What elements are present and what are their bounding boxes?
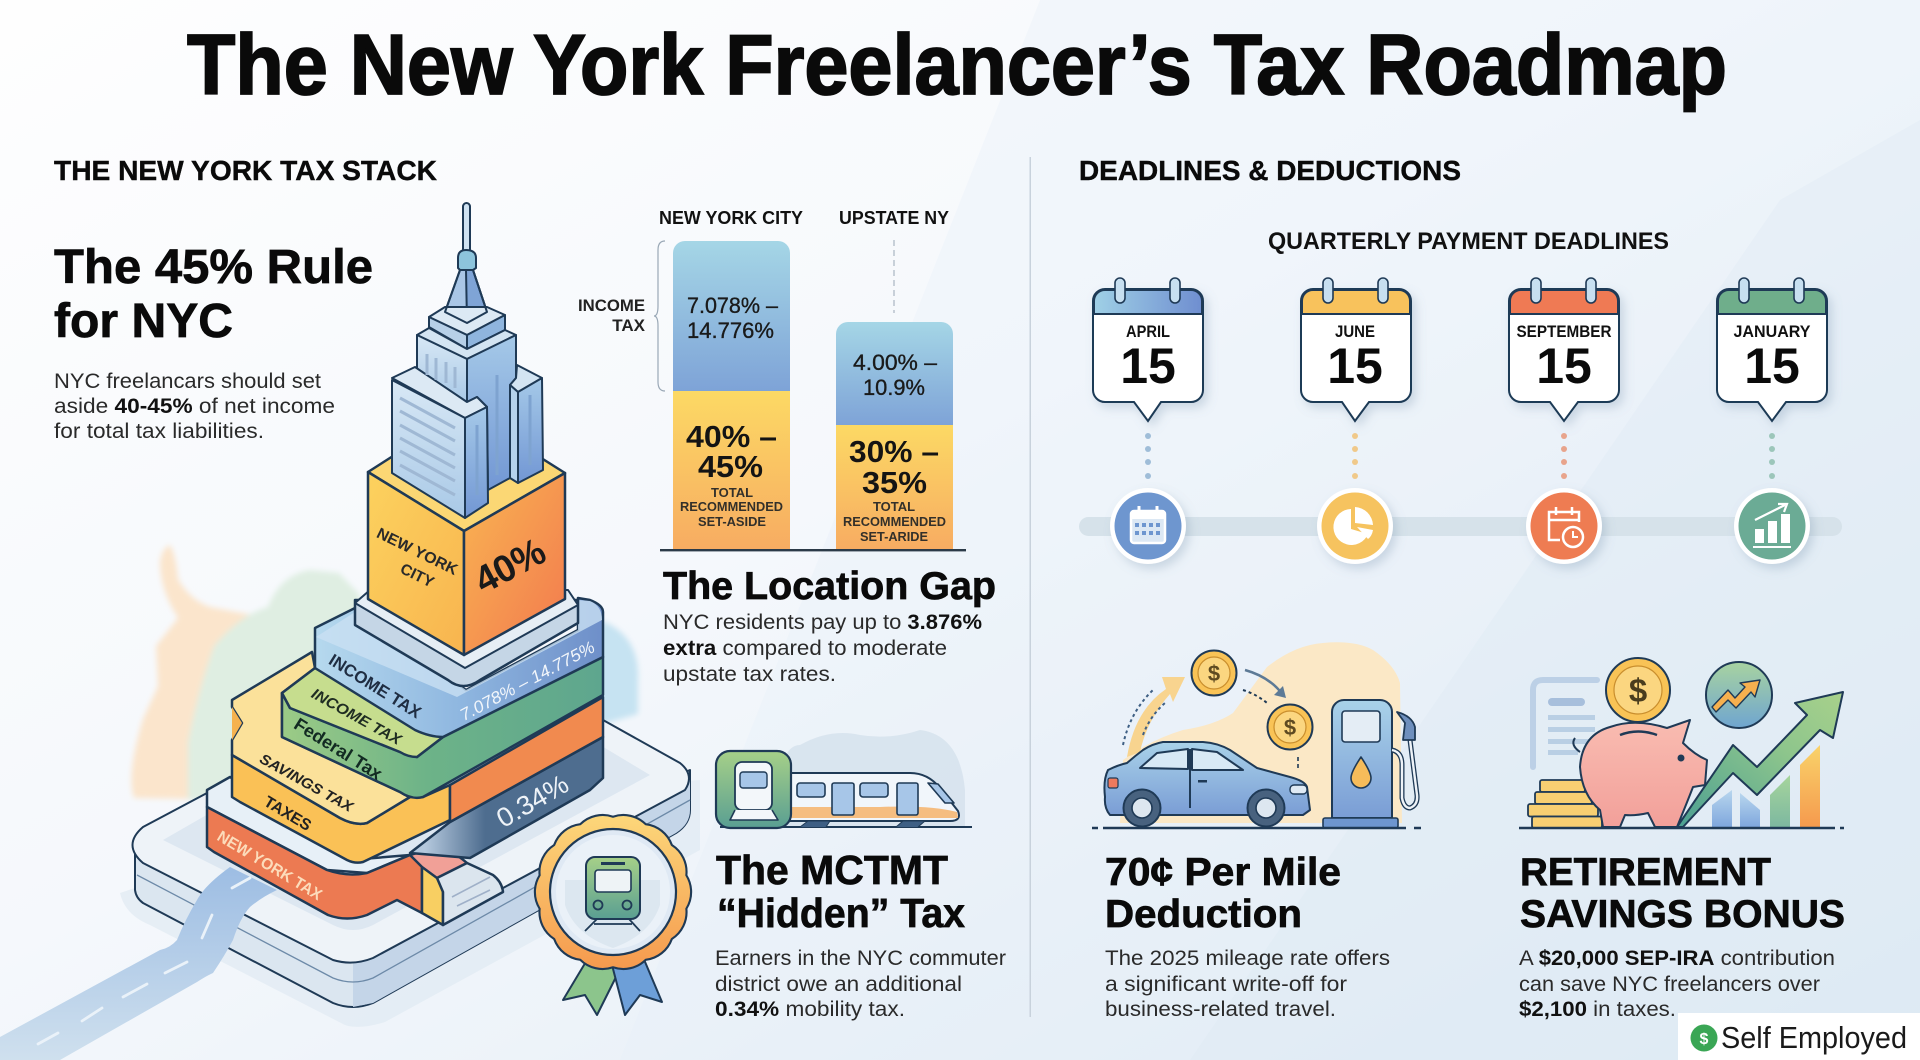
- icon: commuter train: [716, 730, 972, 828]
- chart: location gap bars: SET-ASIDE: [698, 514, 766, 529]
- text block: retirement savings bonus: can save NYC freelancers over: [1519, 972, 1820, 996]
- chart: location gap bars: 45%: [698, 449, 763, 484]
- chart: location gap bars: TOTAL: [711, 485, 753, 500]
- chart: location gap bars: 7.078% –: [687, 293, 779, 318]
- illustration: piggy bank and growth: $: [1629, 672, 1647, 709]
- watermark: self employed: Self Employed: [1721, 1020, 1907, 1055]
- text block: the 45% rule: aside 40-45% of net income: [54, 394, 335, 418]
- chart: location gap bars: 10.9%: [863, 375, 925, 400]
- calendar: september 15: SEPTEMBER: [1516, 323, 1612, 341]
- chart: location gap bars: UPSTATE NY: [839, 207, 950, 228]
- text block: the 45% rule: The 45% Rule: [54, 241, 373, 294]
- layer: new york tax: [207, 777, 503, 925]
- illustration: car and fuel pump: $: [1208, 661, 1220, 686]
- layer: green federal: [282, 657, 603, 798]
- illustration: isometric tax stack: [0, 203, 700, 1060]
- stack labels: [214, 525, 598, 904]
- calendar: june 15: 15: [1327, 338, 1383, 394]
- stack labels: TAXES: [261, 793, 314, 835]
- text block: retirement savings bonus: A $20,000 SEP-IRA contribution: [1519, 946, 1835, 970]
- icon: calendar clock marker: [1526, 488, 1602, 564]
- watermark: self employed: $: [1700, 1031, 1709, 1048]
- chart: location gap bars: [578, 207, 966, 551]
- stack labels: 7.078% – 14.775%: [457, 638, 598, 725]
- stack labels: INCOME TAX: [325, 650, 425, 723]
- text block: 70 cents per mile: Deduction: [1105, 893, 1302, 936]
- text block: the 45% rule: NYC freelancars should set: [54, 369, 321, 393]
- text block: the MCTMT hidden tax: “Hidden” Tax: [717, 890, 965, 936]
- chart: location gap bars: SET-ARIDE: [860, 529, 928, 544]
- illustration: car and fuel pump: $: [1284, 715, 1296, 740]
- text block: the 45% rule: [54, 241, 373, 443]
- icon: pie chart marker: [1317, 488, 1393, 564]
- text block: 70 cents per mile: business-related travel.: [1105, 997, 1336, 1021]
- layer: blue income tax: [315, 598, 603, 737]
- calendar: april 15: APRIL: [1126, 323, 1170, 341]
- stack labels: 40%: [468, 530, 553, 602]
- timeline bar: [1079, 517, 1842, 536]
- stack labels: SAVINGS TAX: [257, 751, 357, 816]
- stack labels: CITY: [397, 561, 437, 592]
- road: [0, 867, 277, 1060]
- chart: location gap bars: RECOMMENDED: [680, 499, 783, 514]
- calendar: january 15: [1717, 278, 1827, 421]
- calendar: june 15: JUNE: [1335, 323, 1375, 341]
- stack labels: NEW YORK TAX: [214, 828, 325, 904]
- platform: [120, 780, 700, 1027]
- text block: the location gap: extra compared to moderate: [663, 636, 947, 660]
- white step: [355, 600, 578, 686]
- chart: location gap bars: RECOMMENDED: [843, 514, 946, 529]
- watermark: self employed: [1678, 1013, 1920, 1060]
- text block: the MCTMT hidden tax: district owe an additional: [715, 972, 962, 996]
- text block: 70 cents per mile: 70¢ Per Mile: [1105, 851, 1341, 894]
- section heading: tax stack: THE NEW YORK TAX STACK: [54, 155, 437, 186]
- illustration: piggy bank and growth: [1519, 658, 1844, 828]
- chart: location gap bars: NEW YORK CITY: [659, 207, 804, 228]
- section divider: [1030, 157, 1031, 1017]
- calendar: april 15: [1093, 278, 1203, 421]
- text block: retirement savings bonus: [1519, 851, 1845, 1021]
- icon: calendar marker: [1110, 488, 1186, 564]
- calendar: january 15: 15: [1744, 338, 1800, 394]
- text block: the location gap: upstate tax rates.: [663, 662, 836, 686]
- chart: location gap bars: INCOME: [578, 296, 645, 315]
- text block: 70 cents per mile: a significant write-off for: [1105, 972, 1347, 996]
- skyscraper: [392, 203, 543, 518]
- stack labels: 0.34%: [491, 769, 574, 834]
- chart: location gap bars: TAX: [612, 316, 646, 335]
- stack labels: NEW YORK: [374, 525, 461, 579]
- text block: the 45% rule: for NYC: [54, 295, 233, 348]
- section heading: deadlines: DEADLINES & DEDUCTIONS: [1079, 155, 1461, 186]
- stack labels: INCOME TAX: [308, 685, 405, 749]
- chart: location gap bars: 30% –: [849, 434, 939, 469]
- heading: quarterly payment deadlines: QUARTERLY PAYMENT DEADLINES: [1268, 228, 1669, 255]
- chart: location gap bars: 40% –: [686, 419, 777, 454]
- calendar: september 15: [1509, 278, 1619, 421]
- text block: the MCTMT hidden tax: Earners in the NYC commuter: [715, 946, 1006, 970]
- text block: the location gap: [663, 565, 996, 686]
- icon: medal with train: [535, 815, 691, 1015]
- text block: 70 cents per mile: [1105, 851, 1390, 1021]
- dotted connectors: [1145, 433, 1775, 479]
- chart: location gap bars: TOTAL: [873, 499, 915, 514]
- text block: 70 cents per mile: The 2025 mileage rate offers: [1105, 946, 1390, 970]
- title: The New York Freelancer’s Tax Roadmap: [187, 18, 1727, 113]
- layer: navy 0.34%: [410, 737, 603, 858]
- text block: retirement savings bonus: $2,100 in taxes.: [1519, 997, 1676, 1021]
- layer: yellow taxes: [232, 755, 450, 863]
- text block: the MCTMT hidden tax: The MCTMT: [716, 847, 948, 893]
- yellow NYC box: [368, 410, 565, 655]
- background blobs: [131, 545, 638, 800]
- chart: location gap bars: 35%: [862, 465, 927, 500]
- icon: growth bars marker: [1734, 488, 1810, 564]
- text block: the location gap: NYC residents pay up to 3.876%: [663, 610, 982, 634]
- chart: location gap bars: 4.00% –: [853, 350, 938, 375]
- calendar: september 15: 15: [1536, 338, 1592, 394]
- stack labels: Federal Tax: [290, 714, 386, 784]
- text block: retirement savings bonus: RETIREMENT: [1520, 851, 1771, 894]
- calendar: april 15: 15: [1120, 338, 1176, 394]
- text block: the location gap: The Location Gap: [663, 565, 996, 608]
- text block: the MCTMT hidden tax: 0.34% mobility tax.: [715, 997, 905, 1021]
- chart: location gap bars: 14.776%: [687, 318, 774, 343]
- calendar: january 15: JANUARY: [1734, 323, 1810, 341]
- illustration: car and fuel pump: [1092, 642, 1421, 828]
- text block: retirement savings bonus: SAVINGS BONUS: [1520, 893, 1845, 936]
- text block: the 45% rule: for total tax liabilities.: [54, 419, 264, 443]
- text block: the MCTMT hidden tax: [715, 847, 1006, 1021]
- calendar: june 15: [1301, 278, 1411, 421]
